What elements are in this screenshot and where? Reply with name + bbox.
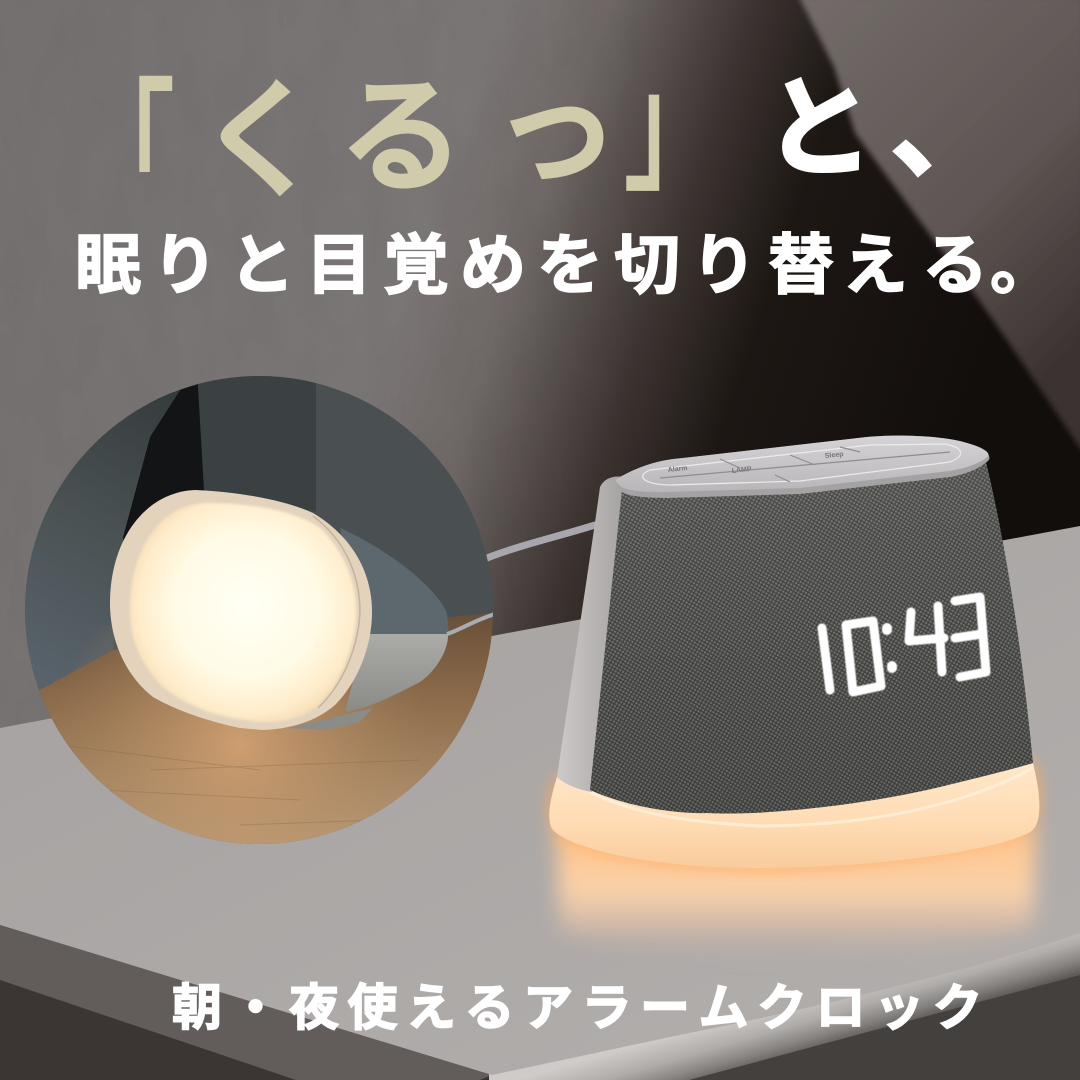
heading line 1: opening bracket: 「 — [81, 72, 174, 228]
table top — [0, 526, 1080, 1075]
digit 1 — [822, 628, 830, 690]
lamp rear body — [287, 528, 449, 730]
nightstand — [0, 526, 1080, 1080]
digit 4 — [909, 606, 944, 672]
button labels: Alarm — [667, 465, 688, 474]
button labels: LAMP — [731, 466, 752, 475]
housing white side — [557, 476, 628, 792]
background: bedroom wall — [0, 0, 1080, 760]
edge lip right — [489, 933, 1080, 1080]
top control plate — [615, 436, 989, 498]
pillow at top right — [798, 0, 1080, 455]
fabric grille — [590, 458, 1033, 814]
tagline: 朝・夜使えるアラームクロック — [172, 980, 982, 1036]
lamp rim — [110, 490, 372, 730]
front face left dark — [0, 925, 492, 1080]
heading line 1: closing bracket: 」 — [625, 51, 718, 207]
warm light reflection on table — [556, 825, 1036, 956]
wooden surface — [20, 613, 500, 850]
lamp glowing face — [130, 503, 356, 722]
digit 3 — [955, 597, 986, 677]
circle background wall — [20, 370, 500, 850]
LED time display 10:43 — [822, 597, 986, 692]
digit 0 — [846, 621, 881, 692]
lamp cable — [447, 614, 495, 634]
heading line 2: 眠りと目覚めを切り替える。 — [75, 228, 1056, 302]
power cable — [487, 525, 595, 558]
blanket at left — [25, 390, 180, 690]
button labels — [667, 451, 844, 475]
inset circle: lamp in the dark — [20, 370, 500, 850]
button labels: Sleep — [824, 451, 844, 460]
glowing base — [548, 760, 1041, 870]
front face right — [640, 965, 1080, 1080]
alarm clock — [548, 436, 1041, 870]
heading line 1: くるっ: くるっ — [198, 61, 619, 211]
colon — [887, 628, 892, 668]
heading line 1: と、: と、 — [764, 68, 1000, 192]
button outline — [643, 444, 961, 485]
lamp rim edge highlight — [313, 516, 360, 708]
front face left band — [0, 925, 492, 1080]
